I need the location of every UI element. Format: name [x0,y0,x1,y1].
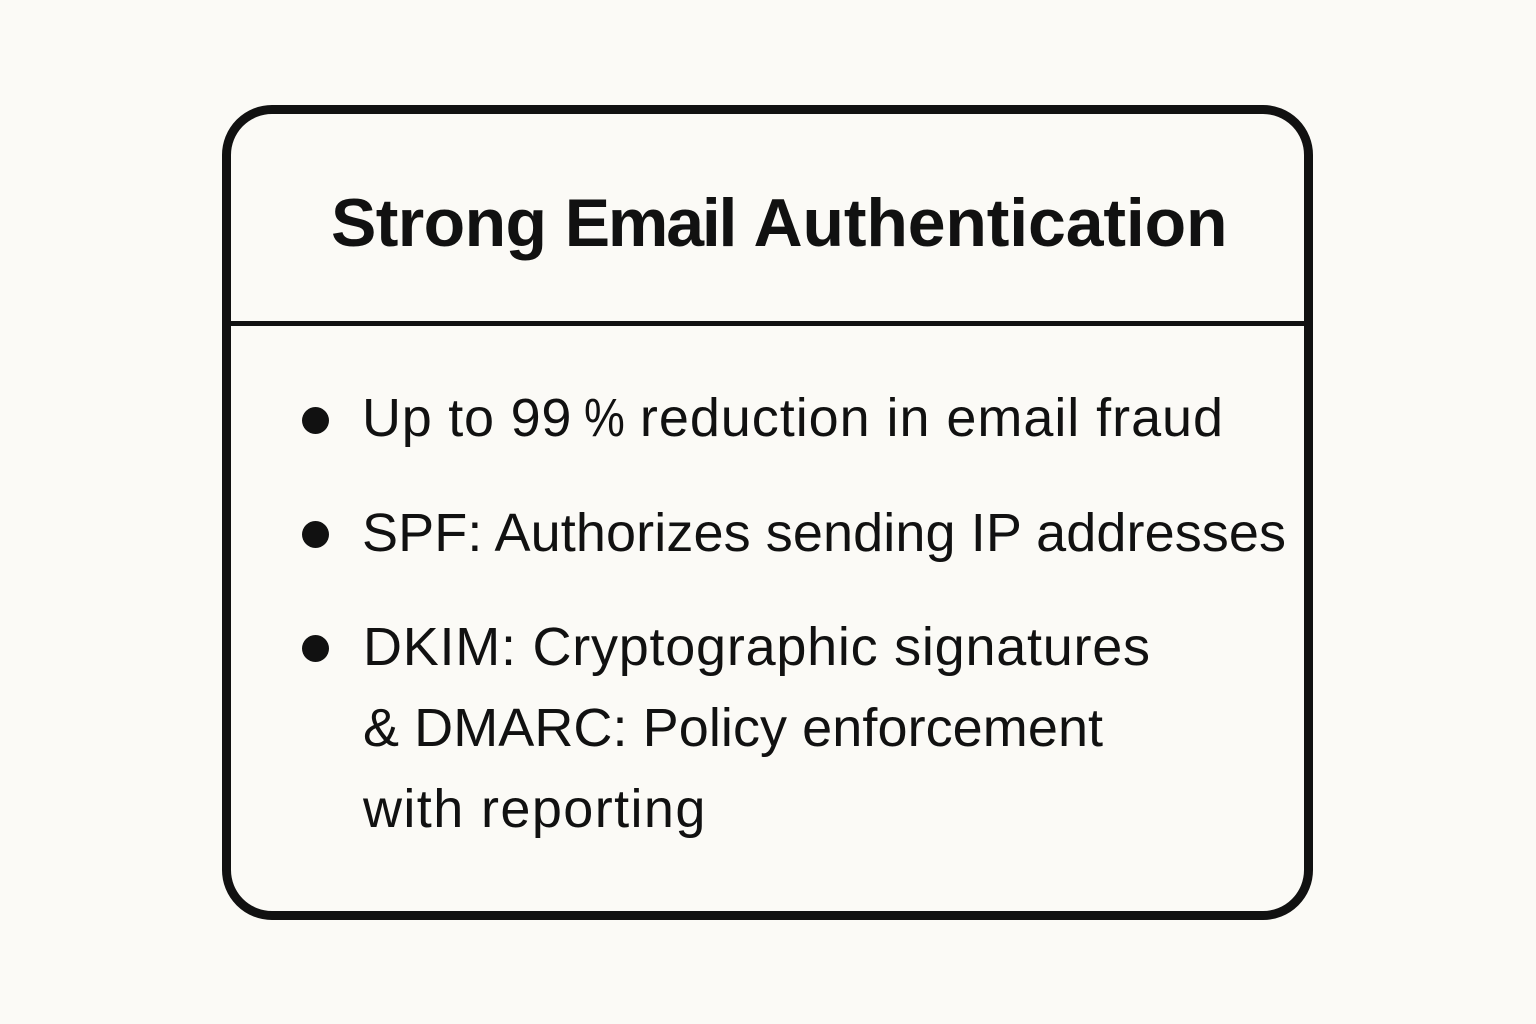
text: DKIM and DMARC [362,617,1151,839]
text: SPF: SPF: Authorizes sending IP addresses [362,503,1286,563]
text: fraud reduction: Up to 99 reduction in email fraud [362,388,1224,448]
bullet icon 1 [302,407,329,434]
text: DKIM and DMARC: with reporting [363,779,707,839]
text: fraud reduction: % [584,388,625,448]
bullet icon 2 [302,521,329,548]
heading: Strong Email Authentication [331,185,1227,261]
text: DKIM and DMARC: DKIM: Cryptographic signatures [363,617,1151,677]
text: DKIM and DMARC: & DMARC: Policy enforcement [363,698,1103,758]
panel: email authentication card [222,105,1313,920]
bullet icon 3 [302,635,329,662]
